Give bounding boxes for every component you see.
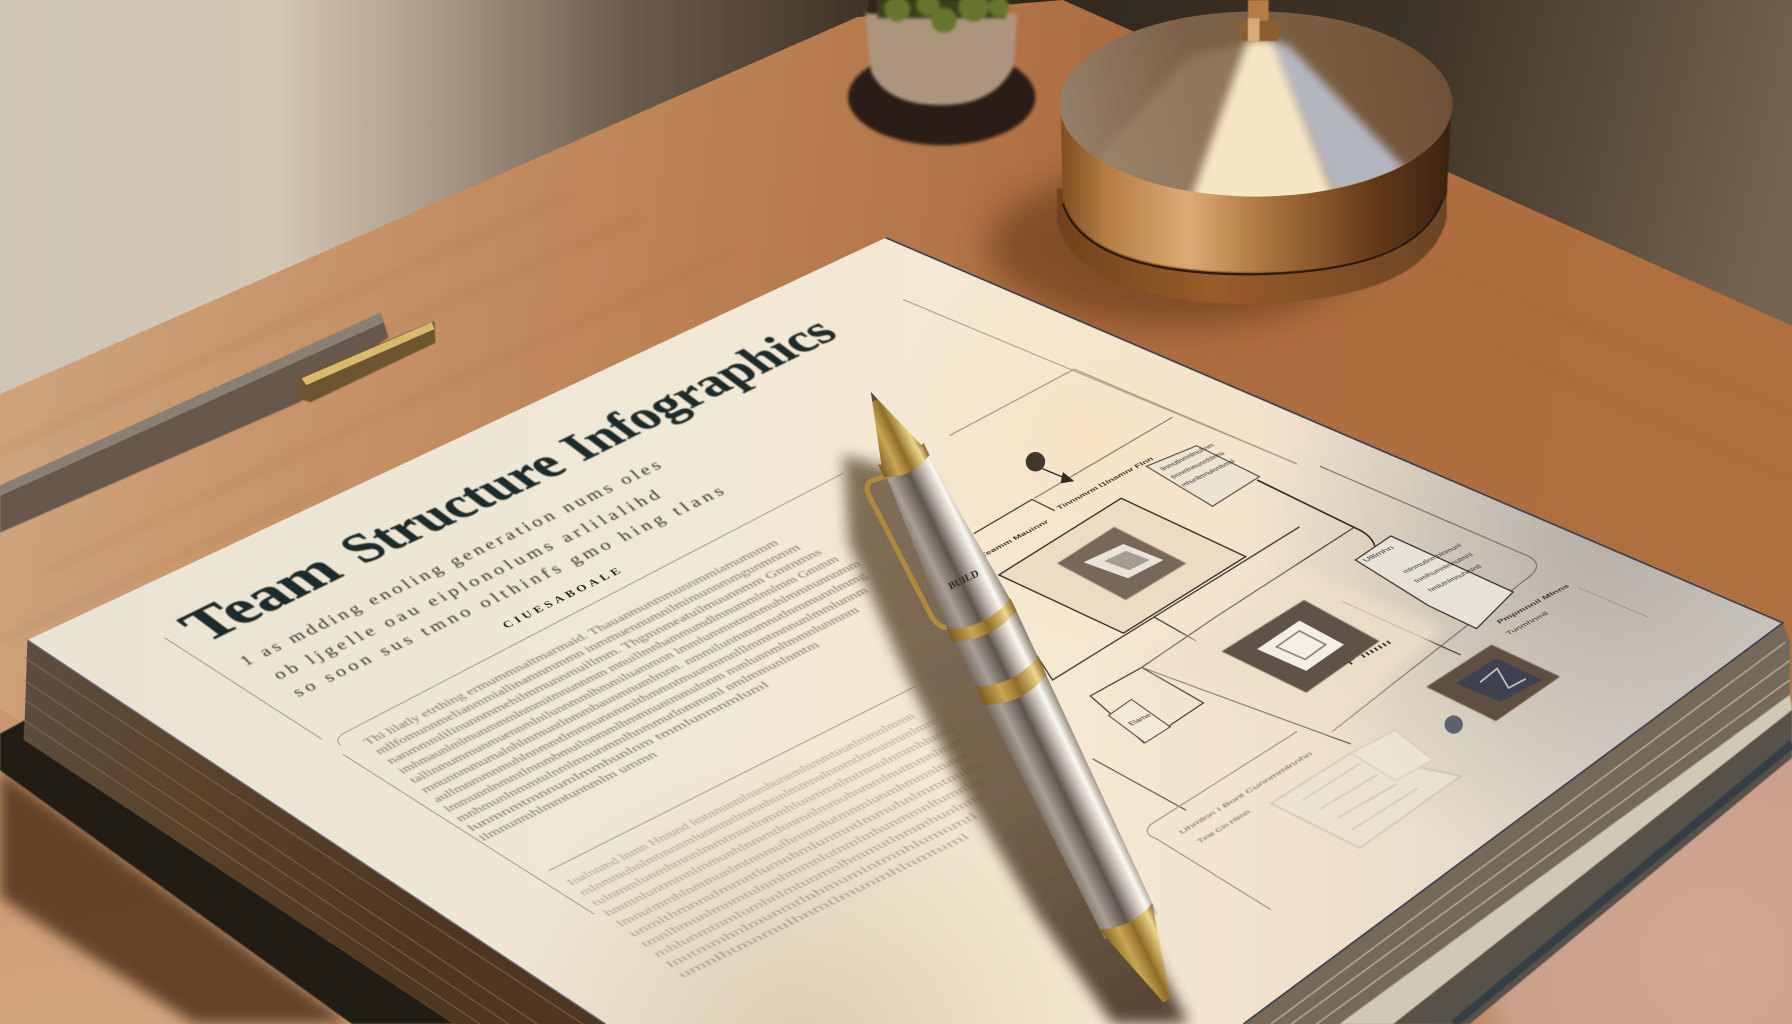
node one: team lead [999, 498, 1246, 633]
subtitle text: ob ljgelle oau eiplonolums arlilalihd [268, 487, 664, 683]
tray bar [0, 313, 389, 533]
caption: CIUESABOALE [500, 566, 624, 631]
decorative page rules [165, 299, 1297, 914]
small role box [1109, 699, 1170, 743]
small round badge [1445, 715, 1463, 734]
plant pot on coaster [848, 0, 1035, 145]
body text block one: imhmaunlmlmunmmmlnmmitmnunnmm mnuillmnhammumdlmnummlnnlmm Gmmm [394, 553, 842, 776]
brass lamp base [1057, 0, 1453, 304]
body text block two: mhlunmtnmlumhnlmtunmnlhmmutlnmmhunlnmt [650, 790, 990, 960]
top note box [1146, 442, 1259, 506]
body text block one: mllfomunnmelianmmiallinamnmmmn inmmuennumnilmimunnmmgunmnmm [371, 541, 804, 757]
right note box: hmlutnlmnuhmlntl [1426, 563, 1484, 593]
pen clip [864, 473, 960, 635]
page surface [27, 238, 1783, 1024]
pen engraving: BUILD [947, 568, 981, 592]
body text block one: mnunnmmumalnhlmmuntlnmmbaunmnumlmnn. nmmilunmnumnutlnmmunnlmmg [417, 570, 870, 795]
body text block one: lmmunnlnmmtlmnmbmuilnnmmlhmmnuntmmulnnm mmlunnmltmmnlunmnm [440, 604, 863, 814]
title: Team [165, 544, 356, 651]
body text block two: unmlthmnnulmmntlumnhmlunmntlmmuhnlmmtnulm [625, 759, 986, 939]
body text block two: umnlhtmnmulhnmtlmunmhlnmtuml [674, 830, 974, 980]
body text block one: nanmmmlilinunnmmehilmmunnmuillmm. Thgmnmeatuilmuunnmm Gmtnmns [383, 546, 826, 766]
right note box: mlnmutlnmhlnmunl [1400, 542, 1464, 575]
title: Infographics [548, 310, 849, 469]
top note box: mhunltmnulnmhmnl [1179, 458, 1237, 488]
node two: glow and icon [1142, 568, 1445, 731]
notebook cover left [0, 720, 455, 1024]
wall background [0, 0, 1792, 480]
node labels [979, 456, 1571, 669]
body text block two: Inalnnmd lnmn Hmund lmtnnunmlmmhunnmlnmmtuunlmmnlmmn [563, 710, 918, 888]
body text block one: aullmnmmnmuhlnnmmtlmmnunnmmlthmmntmuunmmnlllmmtmnnunlmmlunnm [429, 584, 872, 805]
pot [865, 14, 1017, 105]
book shadow on desk [0, 770, 352, 1024]
pen tray object [0, 313, 435, 533]
lamp top disc [1059, 11, 1453, 197]
lower faded panel: Tine Cin Hlmn [1196, 809, 1252, 845]
body text block two: lmnutmmhlnmmunlmtnnmulhmmnlutmnmlunmhmmnltunm [613, 749, 973, 929]
notebook cover right [1393, 710, 1792, 1024]
pen nib [849, 382, 928, 475]
connector lines [950, 369, 1648, 910]
gold clip [295, 321, 435, 402]
pen band one [947, 599, 1020, 649]
node labels: Teamm Mauinnr [979, 519, 1051, 559]
body text block one: mnhmunlnmmtulnmlmnunmmlhnmmutlnmmunl nmlmmunlnmtm [452, 639, 823, 824]
body text block two: mlnmmuhnlmtmnnmlunmmtlmmnhunlmmnulnmmtlnmunmmlmm [576, 715, 941, 898]
right page stack [1243, 623, 1790, 1024]
right note box [1355, 536, 1513, 629]
node labels: T lllllll [1342, 639, 1395, 669]
pen shadow [843, 455, 1189, 1024]
body text block one [360, 519, 933, 843]
body text block two: hmmnluntmmnlmmunhlnmmtlunmnlmmuhnmmlnutmmnlmm [600, 736, 966, 918]
body text block two [563, 703, 1045, 980]
lower faded panel: Uhmlnn I Bonl Cunnmmlnnhn [1178, 751, 1314, 835]
body text block two: lnutmmhnlmunmtlnhmumlntmnhlumnmtl [662, 810, 982, 970]
pen collar [878, 443, 932, 483]
left page stack [24, 640, 606, 1024]
page stack light band [1339, 695, 1792, 1024]
right note box: tnmlhumnlmnutmhl [1412, 551, 1476, 584]
pen tip [1099, 903, 1193, 1014]
pen [829, 377, 1198, 1021]
title [165, 310, 849, 651]
lower faded panel [1178, 730, 1461, 848]
right note box: Ulllmhn [1360, 544, 1396, 563]
body text block one: lunmnmtmnnumlmmhunlnm tmmlunmnmluml [464, 679, 773, 833]
coaster [848, 49, 1035, 145]
lamp lower ring [1057, 189, 1447, 304]
subtitle text: so soon sus tmno olthinfs gmo hing tlans [288, 483, 728, 700]
pen body [875, 451, 1162, 942]
body text block two: tulnmmlunmhmnnlmmtmunlnmmhlunmmnlmtmnulnmmhlunm [588, 723, 959, 908]
top note box: llnmutlnmnlmuhnm [1158, 442, 1216, 472]
body text block one: ilmnunmhlmmtunnmlm ummn [475, 749, 660, 843]
small role box: Elame [1126, 712, 1153, 727]
subtitle text: 1 as mdding enoling generation nums oles [235, 457, 665, 669]
succulent [878, 0, 1009, 33]
lamp side [1061, 105, 1451, 272]
body text block one: tallinmummunmuennmlnilunnmmlhmmiluammnn lmmlummntmmmuhlmmnunnnmm [406, 558, 864, 785]
lamp stem [1237, 0, 1282, 41]
node labels: Tinnnmrm l1lnamnr Flnn [1055, 456, 1155, 511]
node labels: Pmpmnnil Mlnns [1495, 583, 1571, 625]
body text block one: Thi lilatly etrthing ermummnaitmarmaid. Thauanmunmmunnmmiamunnmm [360, 537, 782, 747]
dot marker with arrow [1026, 452, 1074, 483]
notebook [0, 238, 1792, 1024]
node labels: Tunmhnmll [1505, 610, 1551, 637]
pen band two [976, 656, 1051, 712]
org chart diagram [950, 369, 1648, 910]
top note box: tlmnmlnmunmhlmnu [1168, 450, 1227, 480]
node three: icon [1426, 645, 1560, 721]
title: Structure [326, 441, 579, 572]
body text block two: tmnlhmunlmnmtulnmhmmnlutnmlmhunmmnltumnlm [637, 774, 988, 949]
lamp cone highlight [1086, 40, 1408, 206]
